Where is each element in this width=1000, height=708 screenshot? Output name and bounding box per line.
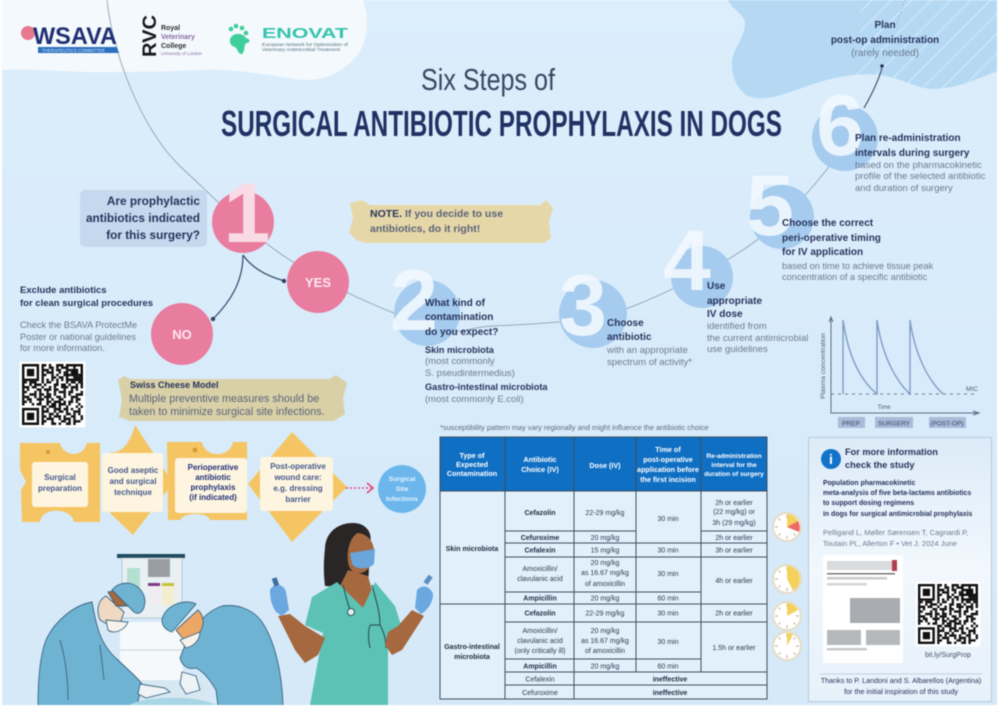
- table body: ineffective: [653, 676, 687, 684]
- logo: ENOVAT: European Network for Optimization of: [262, 42, 349, 47]
- paper thumbnail: [823, 555, 903, 663]
- cheese puzzle piece 1: [20, 443, 100, 522]
- table body: 60 min: [657, 664, 679, 670]
- surgical site infections circle: [378, 465, 426, 513]
- step 5: 5: [746, 158, 794, 254]
- clock icons: [773, 513, 801, 660]
- table body: [444, 500, 756, 697]
- cheese puzzle piece 3: (if indicated): [189, 493, 237, 502]
- cheese puzzle piece 3: [167, 442, 247, 520]
- surgical site infections circle: Site: [396, 486, 408, 493]
- table body: clavulanic acid: [517, 576, 563, 583]
- exclude antibiotics text: Exclude antibiotics: [20, 285, 107, 296]
- study information panel: bit.ly/SurgProp: [925, 652, 971, 659]
- pharmacokinetic chart: [820, 317, 979, 428]
- table body: 60 min: [657, 596, 679, 602]
- illustration: right surgeon: [162, 602, 283, 706]
- table body: ineffective: [653, 690, 687, 697]
- table header: Time of: [655, 445, 681, 454]
- logo: ENOVAT: [229, 24, 349, 54]
- cheese puzzle piece 1: Surgical: [44, 473, 76, 482]
- journey curve: [107, 0, 905, 331]
- step 5: for IV application: [782, 247, 863, 258]
- logo: WSAVA: WSAVA: [33, 23, 117, 50]
- logo: RVC: [140, 15, 203, 57]
- swiss cheese callout: Swiss Cheese Model: [130, 380, 219, 390]
- table body: Cefuroxime: [522, 690, 558, 697]
- illustration: left surgeon: [38, 583, 145, 706]
- table body: Skin microbiota: [446, 546, 498, 553]
- step 2: contamination: [425, 312, 493, 323]
- exclude antibiotics text: Poster or national guidelines: [20, 332, 136, 342]
- step 2: S. pseudintermedius): [425, 368, 515, 379]
- table body: 1.5h or earlier: [712, 645, 756, 652]
- step 6: Plan re-administration: [855, 133, 961, 144]
- logo: ENOVAT: ENOVAT: [262, 26, 348, 42]
- table body: 4h or earlier: [715, 578, 753, 585]
- step 4: identified from: [707, 321, 767, 332]
- step 5: based on time to achieve tissue peak: [782, 261, 934, 271]
- post-op plan text: Plan: [874, 20, 896, 31]
- step 5: Choose the correct: [782, 218, 874, 229]
- step 4: Use: [707, 281, 726, 292]
- exclude antibiotics text: for clean surgical procedures: [20, 298, 153, 309]
- table body: 20 mg/kg: [591, 664, 620, 670]
- step 2: (most commonly: [425, 356, 495, 367]
- step 2: do you expect?: [425, 327, 498, 338]
- table body: Amoxicillin/: [522, 566, 558, 573]
- cheese puzzle piece 4: e.g. dressing: [273, 484, 323, 493]
- study information panel: in dogs for surgical antimicrobial prophylaxis: [823, 511, 972, 518]
- table body: 22-29 mg/kg: [586, 610, 625, 618]
- table header: the first incision: [640, 475, 696, 484]
- cheese puzzle piece 4: Post-operative: [270, 462, 326, 471]
- pharmacokinetic chart: MIC: [966, 386, 978, 393]
- table body: 2h or earlier: [715, 610, 753, 618]
- table body: 3h or earlier: [715, 548, 753, 554]
- title: Six Steps of: [421, 62, 555, 97]
- note tape: antibiotics, do it right!: [370, 223, 480, 235]
- step 2: (most commonly E.coli): [425, 394, 524, 405]
- table body: 2h or earlier: [715, 535, 753, 542]
- table body: 15 mg/kg: [591, 548, 620, 554]
- step 3: with an appropriate: [606, 345, 688, 356]
- cheese puzzle piece 3: Perioperative: [188, 463, 239, 472]
- logo: WSAVA: THERAPEUTICS COMMITTEE: [42, 48, 105, 53]
- step 2: What kind of: [425, 298, 486, 309]
- cheese puzzle piece 3: prophylaxis: [191, 483, 236, 492]
- study QR code: [916, 582, 980, 646]
- table header: Type of: [459, 451, 485, 460]
- table header: post-operative: [643, 455, 693, 464]
- arrows from step 1: [211, 255, 286, 321]
- table body: 30 min: [657, 548, 679, 554]
- table body: 20 mg/kg: [591, 560, 620, 567]
- illustration: surgical drape: [128, 698, 218, 706]
- step 4: [663, 213, 808, 355]
- table header: [447, 445, 764, 484]
- study information panel: Pelligand L, Møller Sørensen T, Cagnardi P,: [823, 528, 968, 537]
- step 3: [559, 258, 692, 368]
- logo: RVC: Veterinary: [161, 34, 195, 41]
- note tape: If you decide to use: [402, 208, 503, 220]
- YES circle: [287, 251, 349, 313]
- step 6: [812, 78, 986, 194]
- table body: (only critically ill): [515, 648, 565, 655]
- post-op plan text: (rarely needed): [851, 48, 919, 59]
- pharmacokinetic chart: Plasma concentration: [820, 332, 827, 399]
- table body: 22-29 mg/kg: [586, 510, 625, 517]
- note tape: [349, 200, 553, 243]
- table body: Cefuroxime: [521, 535, 559, 542]
- step 3: Choose: [607, 318, 644, 329]
- study information panel: Population pharmacokinetic: [823, 480, 915, 487]
- table header: interval for the: [711, 462, 757, 469]
- table body: microbiota: [454, 654, 490, 661]
- swiss cheese callout: Multiple preventive measures should be: [129, 393, 319, 405]
- surgical site infections circle: Surgical: [389, 476, 416, 483]
- exclude antibiotics text: for more information.: [20, 343, 105, 353]
- study information panel: Toutain PL, Allerton F • Vet J. 2024 June: [823, 539, 957, 548]
- study information panel: For more information: [845, 447, 938, 457]
- illustration: operating table: [110, 622, 210, 702]
- table header: Expected: [456, 460, 488, 469]
- table header: Re-administration: [706, 453, 762, 460]
- step 6: intervals during surgery: [855, 148, 970, 159]
- step 6: and duration of surgery: [855, 183, 953, 194]
- question box: step 1: antibiotics indicated: [86, 211, 200, 225]
- pharmacokinetic chart: SURGERY: [878, 420, 911, 428]
- table body: Ampicillin: [523, 664, 557, 670]
- illustration: nurse: [270, 523, 433, 705]
- title: [221, 62, 782, 144]
- step 4: the current antimicrobial: [707, 333, 808, 344]
- table body: Ampicillin: [523, 596, 557, 602]
- table body: 20 mg/kg: [591, 596, 620, 602]
- table body: 2h or earlier: [715, 500, 753, 507]
- table body: (22 mg/kg) or: [713, 509, 755, 516]
- QR code: [20, 362, 85, 427]
- question box: step 1: for this surgery?: [106, 228, 200, 242]
- table body: Amoxicillin/: [522, 628, 558, 635]
- step 4: appropriate: [707, 296, 762, 307]
- step 2: [390, 253, 548, 405]
- table header: application before: [637, 465, 699, 474]
- post-op plan text: [831, 20, 939, 59]
- step 2: 2: [390, 253, 438, 349]
- question box: step 1: [80, 190, 207, 247]
- info icon: [821, 449, 841, 469]
- cheese puzzle piece 2: Good aseptic: [108, 466, 159, 475]
- table header: Antibiotic: [523, 455, 557, 464]
- step 2: Gastro-intestinal microbiota: [425, 382, 548, 392]
- step 6: 6: [816, 78, 864, 174]
- step 2: Skin microbiota: [425, 345, 495, 355]
- table body: clavulanic acid: [517, 638, 563, 645]
- step 4: IV dose: [707, 309, 743, 320]
- table body: Cefazolin: [524, 510, 556, 517]
- pharmacokinetic chart: Time: [877, 405, 891, 411]
- step 1 circle: 1: [224, 166, 270, 260]
- table caption: *susceptibility pattern may vary regionally and might influence the antibiotic choice: [440, 423, 709, 432]
- white header blob: [0, 0, 367, 80]
- step 4: use guidelines: [707, 344, 768, 355]
- study information panel: meta-analysis of five beta-lactams antibiotics: [823, 490, 971, 497]
- study information panel: [808, 438, 992, 702]
- table header: Dose (IV): [589, 461, 621, 470]
- logo: RVC: Royal: [161, 25, 180, 32]
- table body: 20 mg/kg: [591, 628, 620, 635]
- cheese puzzle piece 2: technique: [114, 488, 152, 497]
- step 5: peri-operative timing: [782, 233, 881, 244]
- dotted arrow: [346, 483, 373, 493]
- note tape: NOTE.: [370, 208, 402, 220]
- table body: 20 mg/kg: [591, 535, 620, 542]
- table body: Cefalexin: [525, 676, 555, 684]
- study information panel: for the initial inspiration of this study: [844, 687, 958, 696]
- swiss cheese callout: [118, 375, 347, 421]
- logo: RVC: RVC: [140, 15, 161, 57]
- pharmacokinetic chart: PREP: [842, 420, 860, 428]
- pharmacokinetic chart: (POST-OP): [930, 420, 964, 428]
- NO circle: NO: [172, 327, 192, 342]
- cheese puzzle piece 3: antibiotic: [195, 473, 231, 482]
- swiss cheese callout: taken to minimize surgical site infections.: [129, 406, 325, 418]
- table header: Contamination: [447, 469, 497, 478]
- question box: step 1: Are prophylactic: [107, 194, 200, 208]
- illustration: gloves and instruments: [138, 672, 200, 698]
- table body: Cefazolin: [524, 610, 556, 618]
- NO circle: [151, 303, 213, 365]
- table header: duration of surgery: [704, 471, 764, 478]
- table body: 30 min: [657, 571, 679, 578]
- table body: 30 min: [657, 516, 679, 523]
- info icon: i: [829, 451, 833, 467]
- table body: of amoxicillin: [585, 648, 625, 655]
- logo: ENOVAT: Veterinary Antimicrobial Treatment: [262, 47, 341, 52]
- step 3: 3: [559, 258, 607, 354]
- table body: as 16.67 mg/kg: [581, 570, 629, 577]
- cheese puzzle piece 2: [102, 425, 173, 535]
- YES circle: YES: [305, 275, 331, 290]
- table header: Choice (IV): [521, 465, 559, 474]
- step 3: spectrum of activity*: [607, 357, 692, 368]
- table body: Cefalexin: [524, 548, 556, 554]
- study information panel: check the study: [845, 460, 915, 470]
- surgical site infections circle: Infections: [386, 496, 418, 503]
- step 6: based on the pharmacokinetic: [855, 160, 982, 171]
- study information panel: Thanks to P. Landoni and S. Albarellos (Argentina): [821, 676, 981, 685]
- antibiotic table: [440, 437, 767, 699]
- step 3: antibiotic: [607, 332, 652, 343]
- study information panel: to support dosing regimens: [823, 500, 914, 507]
- table body: 3h (29 mg/kg): [712, 520, 756, 527]
- top right blue blob: [728, 0, 1000, 98]
- step 6: profile of the selected antibiotic: [855, 171, 986, 182]
- cheese puzzle piece 4: [248, 432, 347, 542]
- cheese puzzle piece 4: wound care:: [273, 473, 322, 482]
- logo: RVC: University of London: [161, 51, 203, 56]
- table body: Gastro-intestinal: [444, 644, 500, 651]
- step 5: concentration of a specific antibiotic: [782, 272, 927, 282]
- cheese puzzle piece 2: and surgical: [109, 477, 157, 486]
- table body: 30 min: [657, 610, 679, 618]
- cheese puzzle piece 1: preparation: [38, 484, 82, 493]
- cheese puzzle piece 4: barrier: [285, 495, 311, 504]
- exclude antibiotics text: [20, 285, 153, 353]
- table body: of amoxicillin: [585, 581, 625, 588]
- table body: as 16.67 mg/kg: [581, 638, 629, 645]
- exclude antibiotics text: Check the BSAVA ProtectMe: [20, 320, 137, 330]
- illustration: anesthesia machine: [117, 554, 185, 618]
- table body: 30 min: [657, 639, 679, 646]
- step 5: [746, 158, 934, 282]
- logo: RVC: College: [161, 43, 186, 50]
- post-op plan text: post-op administration: [831, 35, 939, 46]
- step 4: 4: [663, 213, 711, 309]
